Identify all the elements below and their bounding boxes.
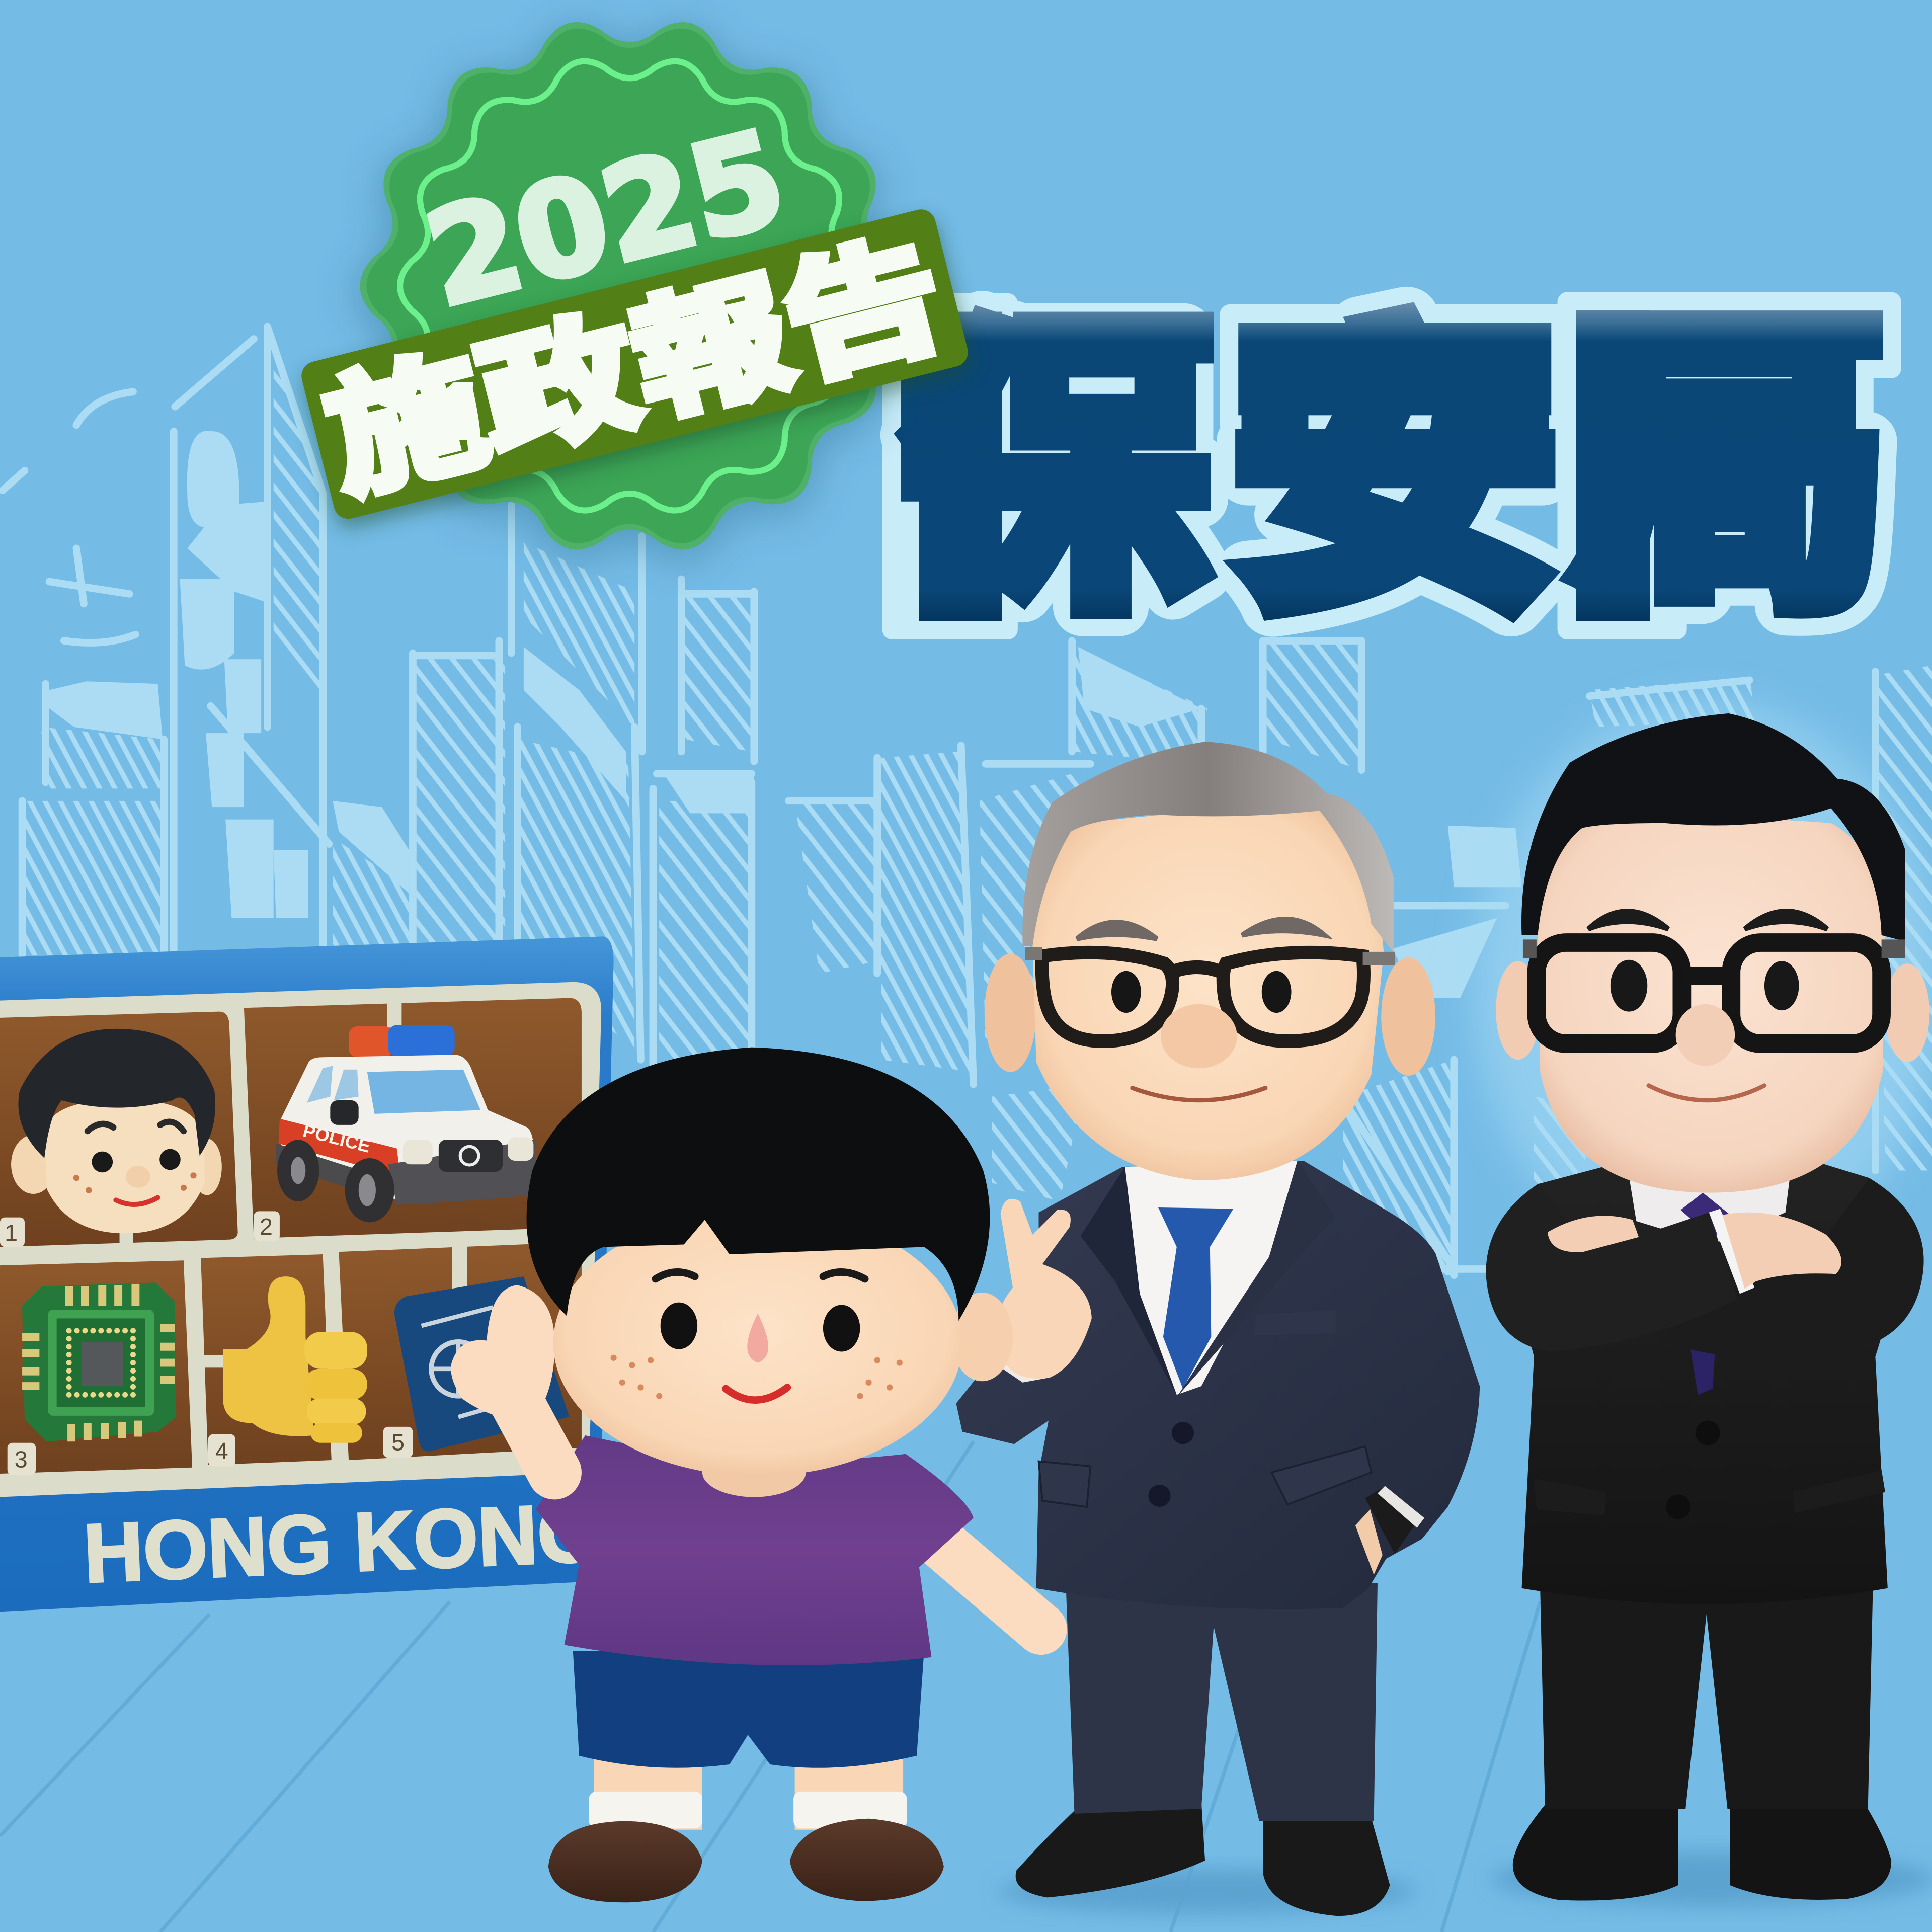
icon: passport bbox=[394, 1276, 569, 1452]
hair bbox=[1022, 742, 1394, 952]
mouth bbox=[1133, 1088, 1265, 1100]
icon: thumbs up bbox=[223, 1276, 367, 1443]
nose bbox=[747, 1314, 768, 1363]
hair bbox=[527, 1048, 990, 1321]
ears bbox=[1496, 961, 1540, 1060]
socks and legs bbox=[589, 1756, 907, 1830]
floor shadow bbox=[998, 1869, 1417, 1913]
nose bbox=[1676, 1004, 1735, 1066]
lower tie bbox=[1691, 1349, 1715, 1395]
shirt bbox=[536, 1435, 974, 1665]
right hand bbox=[1723, 1213, 1841, 1289]
eyebrows bbox=[656, 1272, 865, 1279]
jacket bbox=[1519, 1155, 1892, 1604]
green scalloped seal bbox=[356, 22, 903, 561]
box label: HONG KONG bbox=[82, 1485, 604, 1599]
title: 保安局: 保 bbox=[905, 302, 1210, 644]
hair bbox=[1521, 713, 1905, 941]
glasses bbox=[1523, 942, 1905, 1043]
face bbox=[553, 1210, 962, 1476]
car lettering: POLICE bbox=[301, 1120, 373, 1157]
ears bbox=[951, 1293, 1013, 1381]
head bbox=[1032, 810, 1384, 1180]
tray sprues bbox=[120, 1001, 467, 1367]
left hand bbox=[1548, 1216, 1639, 1252]
jacket bbox=[956, 1161, 1480, 1609]
freckles bbox=[610, 1355, 903, 1399]
cell numbers: 1 bbox=[5, 1220, 18, 1246]
trousers bbox=[1540, 1589, 1873, 1809]
buttons and pockets bbox=[1534, 1421, 1885, 1519]
right arm bbox=[930, 1534, 1041, 1629]
pockets and buttons bbox=[1038, 1310, 1372, 1507]
head bbox=[1538, 818, 1885, 1193]
trousers bbox=[1066, 1583, 1378, 1821]
cell numbers: 4 bbox=[215, 1438, 228, 1464]
ears bbox=[985, 954, 1036, 1072]
neck bbox=[702, 1448, 806, 1497]
eyes bbox=[1111, 971, 1141, 1013]
title: 保安局: 安 bbox=[1229, 303, 1561, 644]
shoes bbox=[1016, 1801, 1205, 1897]
cell numbers bbox=[0, 1211, 413, 1475]
title: 保安局 bbox=[882, 292, 1901, 644]
raised arm bbox=[511, 1392, 554, 1473]
shorts bbox=[573, 1651, 924, 1768]
halo bbox=[1473, 702, 1932, 1269]
title: 保安局: 安 bbox=[1229, 303, 1561, 644]
icon: boy face bbox=[11, 1029, 222, 1233]
floor shadow bbox=[1491, 1852, 1932, 1906]
tie knot bbox=[1680, 1193, 1735, 1238]
raised fist bbox=[451, 1285, 554, 1424]
toy box panel bbox=[0, 936, 614, 1612]
title: 保安局: 保 bbox=[905, 302, 1210, 644]
shirt bbox=[1627, 1155, 1793, 1244]
mouth bbox=[1649, 1086, 1764, 1100]
shoes bbox=[1513, 1793, 1678, 1901]
cell numbers: 2 bbox=[260, 1214, 273, 1240]
title: 保安局: 局 bbox=[1571, 303, 1889, 644]
cream tray bbox=[0, 982, 601, 1497]
cell numbers: 5 bbox=[391, 1429, 405, 1455]
eyes bbox=[1611, 960, 1647, 1012]
lower arm bbox=[1639, 1178, 1924, 1358]
nose bbox=[1161, 1004, 1237, 1068]
glasses bbox=[1025, 952, 1395, 1041]
eyebrows bbox=[1588, 911, 1668, 929]
skyline sketch bbox=[3, 327, 1932, 1275]
brush blobs bbox=[49, 431, 1521, 998]
blue box bbox=[0, 936, 614, 1612]
lapels bbox=[1081, 1167, 1177, 1395]
shirt bbox=[1125, 1161, 1298, 1395]
eyebrows bbox=[1077, 922, 1157, 939]
badge year: 2025 bbox=[413, 102, 799, 336]
floor lines bbox=[0, 1441, 1540, 1932]
tie bbox=[1158, 1208, 1233, 1389]
character: man in navy suit bbox=[956, 742, 1480, 1916]
finger heart hand bbox=[992, 1199, 1092, 1383]
badge heading band bbox=[298, 206, 973, 530]
icon: police car bbox=[276, 1025, 537, 1222]
icon: microchip bbox=[22, 1282, 176, 1441]
building walls bbox=[3, 327, 1875, 1275]
badge: 2025 policy address bbox=[298, 22, 973, 561]
hatching fills bbox=[19, 357, 1932, 1275]
character: man in black suit bbox=[1473, 702, 1932, 1906]
eyes bbox=[661, 1303, 697, 1349]
badge heading text: 施政報告 bbox=[313, 219, 958, 517]
character: boy bbox=[451, 1048, 1041, 1902]
title: 保安局: 局 bbox=[1571, 303, 1889, 644]
cell numbers: 3 bbox=[15, 1446, 28, 1473]
watch bbox=[1355, 1486, 1424, 1575]
brown cells bbox=[0, 998, 582, 1474]
upper arm bbox=[1486, 1184, 1737, 1352]
mouth bbox=[726, 1388, 787, 1400]
shoes bbox=[548, 1821, 702, 1902]
cuff bbox=[1709, 1209, 1754, 1294]
